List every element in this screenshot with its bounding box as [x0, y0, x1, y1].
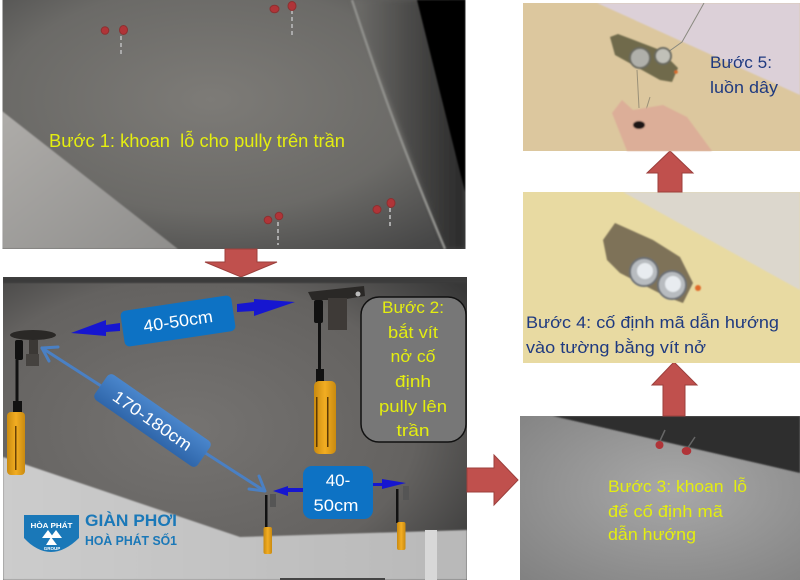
callout: step 2 text box: bắt vít [388, 323, 438, 342]
icon: drill marks group [101, 2, 395, 245]
callout: step 2 text box: trần [396, 421, 430, 440]
text: step 3 description: để cố định mã [608, 502, 724, 521]
callout: step 2 text box [361, 297, 466, 442]
panel: step 5 threading wire photo [523, 3, 800, 151]
logo: Hoa Phat brand: HOÀ PHÁT SỐ1 [85, 533, 177, 548]
arrow: small left blue arrow [273, 486, 304, 496]
callout: step 2 text box: Bước 2: [382, 298, 444, 317]
callout: step 2 text box: nở cố [390, 347, 436, 366]
heading: step 1 text: Bước 1: khoan lỗ cho pully trên trần [49, 130, 345, 151]
text: step 4 description: vào tường bằng vít nở [526, 338, 706, 357]
arrow: small right blue arrow [373, 479, 406, 489]
arrow: long diagonal dimension [42, 347, 265, 491]
callout: 170-180cm diagonal label: 170-180cm [109, 387, 195, 455]
icon: bracket with two pulleys [603, 223, 701, 303]
arrow: step 1 to step 2 [205, 249, 277, 277]
text: step 4 description: Bước 4: cố định mã dẫn hướng [526, 313, 779, 332]
logo: Hoa Phat brand: HÒA PHÁT [30, 521, 73, 530]
text: step 3 description [608, 477, 747, 544]
callout: step 2 text box: định [395, 372, 431, 391]
icon: small left pulley and screwdriver [264, 494, 276, 554]
logo: Hoa Phat brand: GROUP [44, 546, 60, 551]
text: step 4 description [526, 313, 779, 357]
text: step 5 description [710, 53, 779, 97]
icon: drill marks on wall [656, 441, 691, 455]
callout: 40-50cm small label: 40- [326, 471, 350, 490]
arrow: step 3 to step 4 [652, 362, 697, 416]
logo: Hoa Phat brand [24, 511, 177, 552]
callout: 40-50cm top label [120, 295, 236, 347]
text: step 5 description: Bước 5: [710, 53, 772, 72]
icon: bracket and pulleys [610, 34, 678, 82]
icon: hand holding wire [612, 100, 712, 151]
icon: left large pulley and screwdriver [7, 330, 56, 475]
arrow: top left blue arrow [71, 320, 120, 336]
text: step 3 description: dẫn hướng [608, 525, 696, 544]
callout: 170-180cm diagonal label [92, 372, 213, 469]
arrow: step 4 to step 5 [647, 151, 693, 192]
icon: right large pulley and screwdriver [308, 286, 365, 454]
text: step 5 description: luồn dây [710, 78, 779, 97]
icon: small right pulley and screwdriver [396, 486, 409, 550]
callout: 40-50cm small label [303, 466, 373, 519]
callout: 40-50cm top label: 40-50cm [142, 307, 214, 336]
logo: Hoa Phat brand: GIÀN PHƠI [85, 511, 177, 530]
panel: step 2 ceiling with pulleys [3, 277, 467, 580]
callout: step 2 text box: pully lên [379, 397, 447, 416]
arrow: top right blue arrow [237, 299, 295, 316]
text: step 3 description: Bước 3: khoan lỗ [608, 477, 747, 496]
arrow: step 2 to step 3 [467, 455, 518, 505]
callout: 40-50cm small label: 50cm [314, 496, 358, 515]
panel: step 3 wall drilling photo [520, 416, 800, 580]
panel: step 1 ceiling drilling photo [2, 0, 466, 249]
panel: step 4 guide bracket photo [523, 192, 800, 363]
